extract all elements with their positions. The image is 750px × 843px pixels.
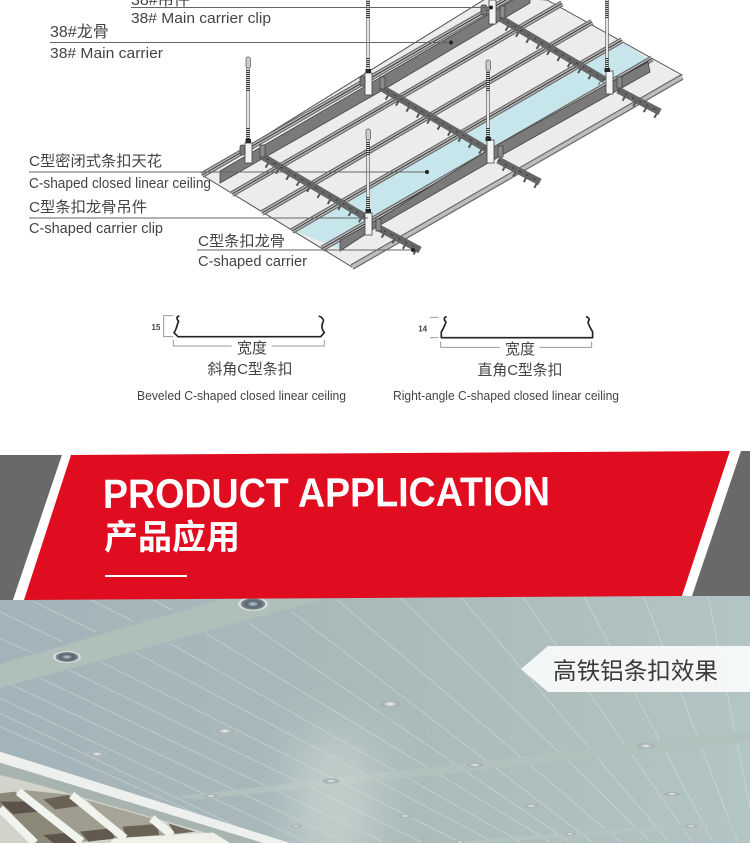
white beam (0, 752, 290, 843)
label: C-shaped carrier clip: C-shaped carrier clip (29, 220, 163, 237)
label: C-shaped closed linear ceiling: C-shaped closed linear ceiling (29, 175, 211, 192)
recessed lights (53, 597, 699, 843)
slatted panel 2 (23, 790, 125, 842)
beveled profile drawing: 15 (152, 323, 161, 332)
banner chinese heading: 产品应用 (104, 519, 240, 557)
bottom-left beam and concourse scene (0, 752, 290, 843)
right-angle profile drawing: 14 (418, 325, 428, 334)
right-angle profile: 宽度 (505, 341, 535, 358)
label: 38# main carrier clip: 38# Main carrier clip (131, 10, 271, 27)
slatted panel 2 dark band (43, 795, 80, 809)
light sheen (300, 740, 370, 843)
right-angle profile: Right-angle C-shaped closed linear ceiling (393, 389, 619, 403)
slatted panel 4 (168, 823, 195, 834)
label: C-shaped closed linear ceiling (29, 153, 429, 192)
beveled profile: 斜角C型条扣 (208, 361, 292, 378)
label: C-shaped carrier: C-shaped carrier (198, 253, 307, 270)
label: 38# main carrier: 38# Main carrier (50, 45, 163, 62)
beveled profile (137, 316, 346, 403)
beveled profile drawing (152, 316, 324, 346)
label: C-shaped carrier: C型条扣龙骨 (198, 233, 285, 250)
ceiling strip seams (0, 595, 750, 842)
slatted panel 1 lower band (43, 833, 78, 843)
scene base (0, 775, 227, 843)
right-angle profile (393, 317, 619, 403)
middle light strip (175, 730, 750, 800)
beveled profile: 宽度 (237, 340, 267, 357)
upper light strip (0, 600, 224, 688)
label: C-shaped carrier clip: C型条扣龙骨吊件 (29, 199, 147, 216)
section banner (0, 451, 750, 600)
highlighted blue panel (297, 42, 652, 249)
banner underline (105, 575, 187, 577)
label: 38# main carrier (50, 23, 453, 62)
slatted panel 1 (0, 792, 64, 843)
ceiling installation diagram (202, 0, 682, 267)
beveled profile: Beveled C-shaped closed linear ceiling (137, 389, 346, 403)
label: 38# main carrier: 38#龙骨 (50, 23, 109, 41)
linear rails (202, 0, 682, 267)
slatted panel 3 (87, 800, 172, 838)
white right stripe (682, 451, 741, 596)
red banner panel (24, 451, 730, 600)
white left stripe (13, 455, 71, 600)
label: 38# main carrier clip (131, 0, 493, 27)
label: C-shaped carrier (197, 233, 415, 270)
right-angle profile drawing (418, 317, 593, 347)
right-angle profile: 直角C型条扣 (478, 362, 562, 379)
grey beam underside (0, 763, 263, 843)
grey right block (692, 451, 750, 596)
white ribs (0, 792, 172, 843)
photo caption tag: 高铁铝条扣效果 (553, 658, 718, 684)
photo: high-speed rail aluminium ceiling (0, 595, 750, 843)
slatted panel 3 dark band (123, 824, 159, 837)
upper 38# main carrier (220, 0, 530, 183)
ceiling panels (202, 0, 682, 267)
label: C-shaped carrier clip (29, 199, 368, 237)
slatted panel 1 dark band (0, 802, 40, 814)
C-shaped cross carriers (260, 18, 660, 254)
slatted panel 2 lower band (80, 828, 115, 842)
lower light strip (450, 820, 732, 843)
lower 38# main carrier (340, 62, 650, 251)
grey left block (0, 455, 62, 600)
hanger rods (246, 0, 607, 210)
photo caption tag (521, 646, 750, 692)
label: C-shaped closed linear ceiling: C型密闭式条扣天花 (29, 153, 162, 170)
white lower walkway (110, 833, 230, 843)
rod nuts (246, 68, 610, 213)
carrier clips (240, 0, 622, 235)
banner english heading: PRODUCT APPLICATION (103, 468, 550, 517)
